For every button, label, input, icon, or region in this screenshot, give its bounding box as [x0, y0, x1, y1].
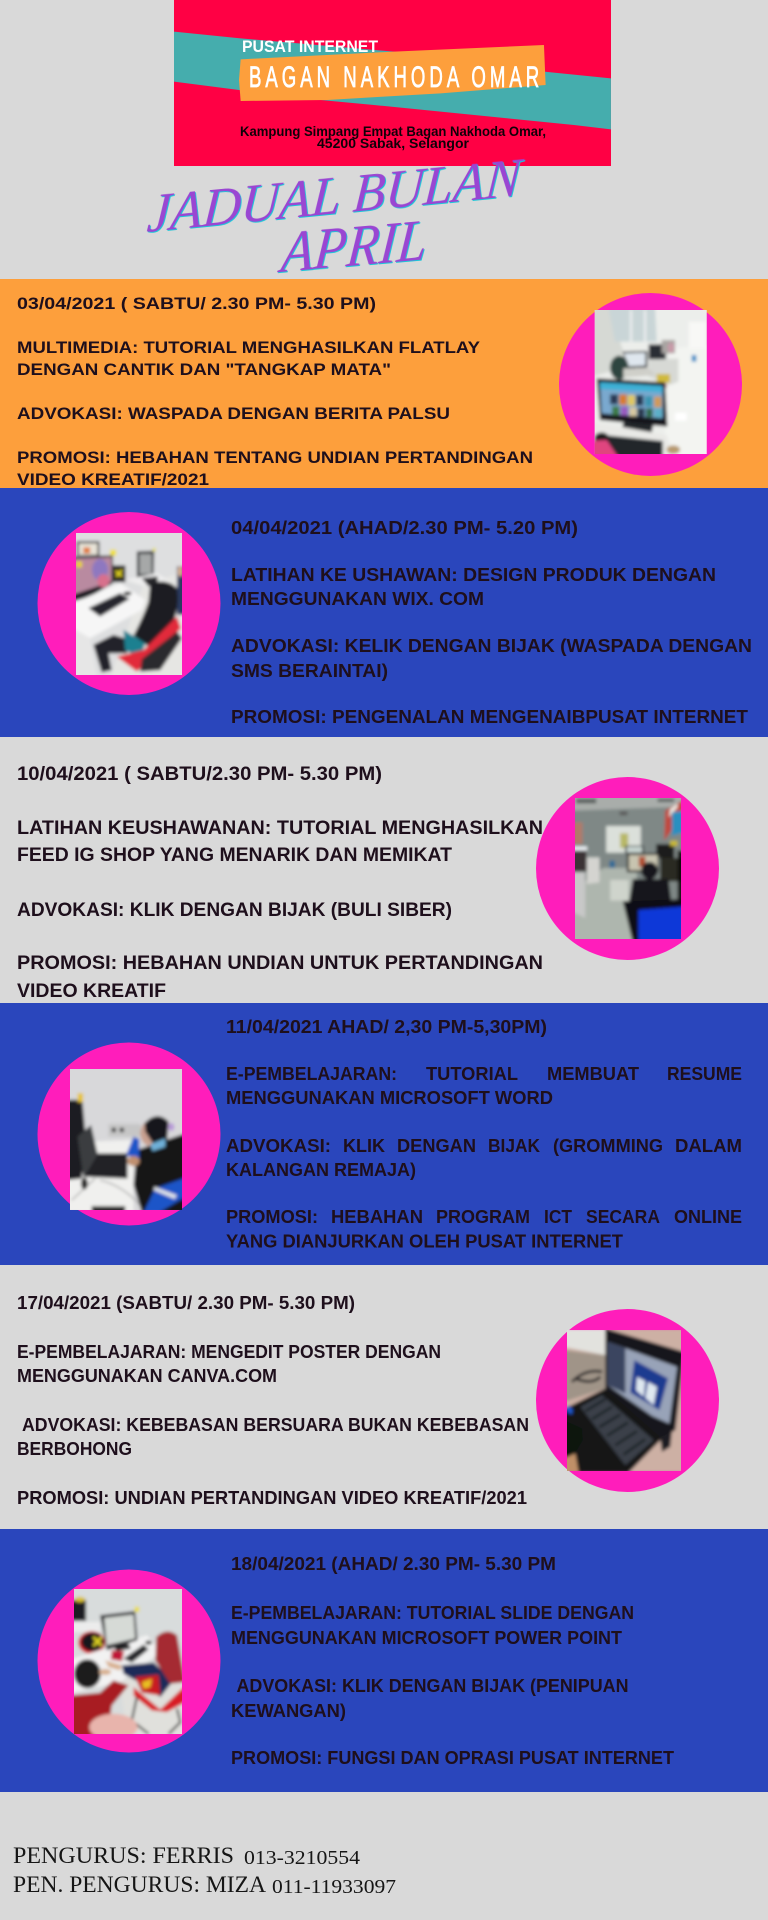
- text: e-pembelajaran: MENGGUNAKAN MICROSOFT WORD: [226, 1087, 553, 1108]
- text: e-pembelajaran: MEMBUAT: [547, 1063, 640, 1084]
- text: latihan keushawanan: [17, 818, 543, 866]
- title: jadual bulan april: JADUAL BULAN: [145, 147, 526, 244]
- text: promosi: VIDEO KREATIF/2021: [17, 470, 209, 489]
- logo text: address: [240, 124, 546, 151]
- contact: manager: PENGURUS: FERRIS: [13, 1843, 234, 1868]
- date heading: 10/04/2021 ( SABTU/2.30 PM- 5.30 PM): [17, 764, 382, 785]
- text: multimedia: DENGAN CANTIK DAN "TANGKAP MATA": [17, 360, 391, 379]
- text: promosi: SECARA: [586, 1206, 660, 1227]
- text: advokasi: [231, 1675, 628, 1721]
- text: latihan keusahawan: [231, 564, 716, 609]
- text: advokasi: BIJAK: [488, 1135, 541, 1156]
- text: advokasi: ADVOKASI: KLIK DENGAN BIJAK (BULI SIBER): [17, 900, 452, 921]
- text: promosi: [17, 448, 533, 489]
- text: promosi: HEBAHAN: [331, 1206, 423, 1227]
- photo circle: participant at computer: [38, 512, 220, 695]
- text: multimedia: [17, 338, 481, 379]
- contact: assistant manager: 011-11933097: [272, 1876, 396, 1898]
- contact: manager: 013-3210554: [244, 1847, 360, 1869]
- logo banner: [174, 0, 611, 166]
- text: e-pembelajaran: RESUME: [667, 1063, 742, 1084]
- text: latihan keushawanan: FEED IG SHOP YANG MENARIK DAN MEMIKAT: [17, 845, 452, 866]
- photo circle: laptop on table: [536, 1309, 719, 1492]
- text: e-pembelajaran: MENGGUNAKAN CANVA.COM: [17, 1365, 277, 1386]
- text: advokasi: DENGAN: [397, 1135, 476, 1156]
- panel: 10/04/2021: [17, 764, 719, 1002]
- text: promosi: PROMOSI: HEBAHAN TENTANG UNDIAN PERTANDINGAN: [17, 448, 533, 467]
- logo text: address: 45200 Sabak, Selangor: [317, 136, 470, 151]
- text: advokasi: ADVOKASI:: [226, 1135, 331, 1156]
- text: promosi: [17, 953, 543, 1002]
- text: promosi: YANG DIANJURKAN OLEH PUSAT INTERNET: [226, 1230, 624, 1252]
- text: e-pembelajaran: TUTORIAL: [426, 1063, 518, 1084]
- text: e-pembelajaran: E-PEMBELAJARAN:: [226, 1063, 397, 1084]
- title: jadual bulan april: [145, 147, 526, 285]
- date heading: 03/04/2021 ( SABTU/ 2.30 PM- 5.30 PM): [17, 294, 376, 313]
- contact: assistant manager: PEN. PENGURUS: MIZA: [13, 1872, 266, 1897]
- text: advokasi: BERBOHONG: [17, 1438, 132, 1459]
- text: e-pembelajaran: E-PEMBELAJARAN: MENGEDIT POSTER DENGAN: [17, 1341, 441, 1362]
- text: advokasi: ADVOKASI: KEBEBASAN BERSUARA BUKAN KEBEBASAN: [22, 1414, 529, 1435]
- photo circle: dim classroom: [536, 777, 719, 960]
- text: promosi: PROMOSI: FUNGSI DAN OPRASI PUSAT INTERNET: [231, 1747, 675, 1768]
- panel: 11/04/2021: [0, 1003, 768, 1265]
- text: multimedia: MULTIMEDIA: TUTORIAL MENGHASILKAN FLATLAY: [17, 338, 481, 357]
- text: e-pembelajaran: MENGGUNAKAN MICROSOFT POWER POINT: [231, 1627, 623, 1648]
- text: e-pembelajaran: [226, 1063, 742, 1108]
- text: advokasi: ADVOKASI: KELIK DENGAN BIJAK (WASPADA DENGAN: [231, 635, 752, 656]
- panel: 03/04/2021: [0, 279, 768, 489]
- logo text: pusat internet: PUSAT INTERNET: [242, 37, 379, 56]
- panel: 04/04/2021: [0, 488, 768, 737]
- photo circle: computer room: [559, 293, 742, 476]
- panel: 18/04/2021: [0, 1529, 768, 1792]
- text: promosi: PROMOSI:: [226, 1206, 318, 1227]
- text: advokasi: [17, 1414, 529, 1459]
- contact: manager: [13, 1843, 360, 1869]
- text: latihan keusahawan: MENGGUNAKAN WIX. COM: [231, 588, 484, 609]
- text: promosi: VIDEO KREATIF: [17, 981, 166, 1002]
- text: e-pembelajaran: [231, 1602, 634, 1648]
- text: advokasi: [226, 1135, 742, 1180]
- date heading: 11/04/2021 AHAD/ 2,30 PM-5,30PM): [226, 1016, 547, 1037]
- date heading: 17/04/2021 (SABTU/ 2.30 PM- 5.30 PM): [17, 1292, 355, 1313]
- text: advokasi: KLIK: [343, 1135, 386, 1156]
- title: jadual bulan april: APRIL: [275, 207, 430, 285]
- text: promosi: ONLINE: [674, 1206, 742, 1227]
- photo circle: woman and child at computer: [38, 1570, 220, 1752]
- photo circle: participant with laptop: [38, 1042, 220, 1226]
- text: promosi: PROMOSI: HEBAHAN UNDIAN UNTUK PERTANDINGAN: [17, 953, 543, 974]
- text: advokasi: KEWANGAN): [231, 1700, 346, 1721]
- date heading: 04/04/2021 (AHAD/2.30 PM- 5.20 PM): [231, 517, 578, 538]
- text: advokasi: KALANGAN REMAJA): [226, 1159, 416, 1180]
- text: advokasi: (GROMMING: [553, 1135, 663, 1156]
- text: latihan keushawanan: LATIHAN KEUSHAWANAN: TUTORIAL MENGHASILKAN: [17, 818, 543, 839]
- text: promosi: PROMOSI: UNDIAN PERTANDINGAN VIDEO KREATIF/2021: [17, 1487, 527, 1508]
- text: e-pembelajaran: E-PEMBELAJARAN: TUTORIAL SLIDE DENGAN: [231, 1602, 634, 1623]
- footer: contacts: [13, 1843, 396, 1898]
- text: promosi: ICT: [544, 1206, 573, 1227]
- text: advokasi: SMS BERAINTAI): [231, 660, 388, 681]
- text: promosi: [226, 1206, 742, 1252]
- text: advokasi: DALAM: [675, 1135, 742, 1156]
- text: advokasi: [231, 635, 752, 681]
- text: e-pembelajaran: [17, 1341, 441, 1386]
- logo text: address: Kampung Simpang Empat Bagan Nakhoda Omar,: [240, 124, 546, 139]
- text: advokasi: ADVOKASI: KLIK DENGAN BIJAK (PENIPUAN: [236, 1675, 628, 1696]
- logo text: centre name: BAGAN NAKHODA OMAR: [249, 61, 539, 94]
- text: promosi: PROMOSI: PENGENALAN MENGENAIBPUSAT INTERNET: [231, 706, 749, 727]
- panel: 17/04/2021: [17, 1292, 719, 1508]
- text: promosi: PROGRAM: [436, 1206, 530, 1227]
- date heading: 18/04/2021 (AHAD/ 2.30 PM- 5.30 PM: [231, 1553, 556, 1574]
- text: latihan keusahawan: LATIHAN KE USHAWAN: DESIGN PRODUK DENGAN: [231, 564, 716, 585]
- text: advokasi: ADVOKASI: WASPADA DENGAN BERITA PALSU: [17, 404, 450, 423]
- contact: assistant manager: [13, 1872, 396, 1898]
